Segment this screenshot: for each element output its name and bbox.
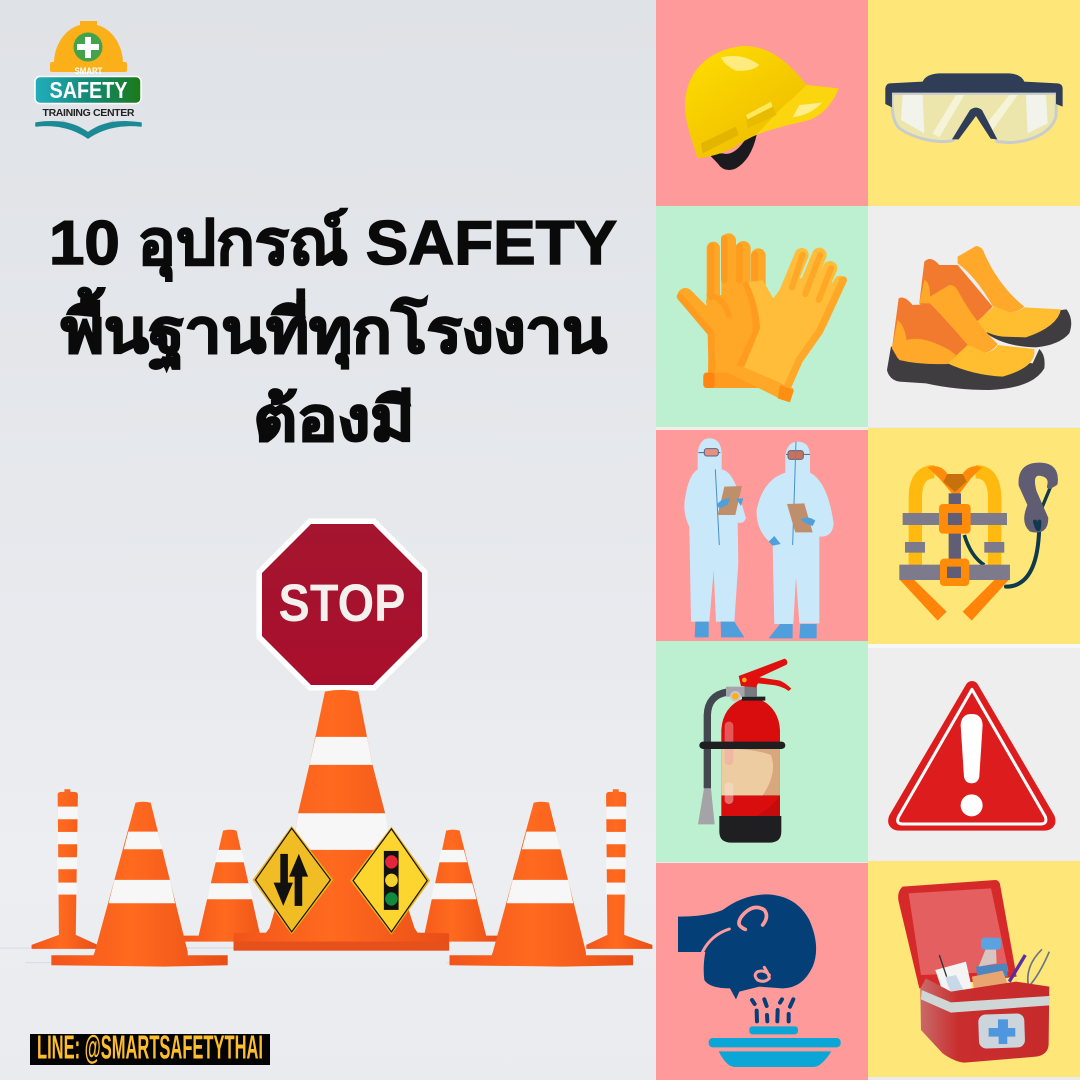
icon: orange gloves (680, 238, 843, 402)
big cone left (51, 802, 228, 967)
main cone (234, 690, 449, 951)
title (49, 208, 617, 453)
small cone right (412, 830, 501, 942)
right post (586, 789, 652, 949)
panel: first aid kit (868, 861, 1080, 1077)
big cone right (450, 802, 633, 967)
road sign: two-way arrows (253, 826, 333, 935)
panel: warning sign (868, 644, 1080, 861)
left post (32, 789, 98, 949)
icon: harness and lanyard (899, 465, 1056, 621)
logo: Smart Safety Training Center: TRAINING CENTER (42, 107, 135, 119)
traffic cones illustration (0, 690, 652, 967)
panel: gloves (656, 206, 868, 427)
panel: safety harness (868, 428, 1080, 644)
icon: extinguisher (698, 659, 791, 843)
LINE handle label: LINE: @SMARTSAFETYTHAI (37, 1028, 263, 1066)
right glove (729, 255, 843, 402)
title: พื้นฐานที่ทุกโรงงาน (61, 287, 607, 370)
icon: head over basin (678, 894, 841, 1067)
panel: hard hat (656, 0, 868, 206)
stop sign (257, 519, 427, 690)
background panel (0, 0, 656, 1080)
icon: warning triangle (895, 688, 1049, 824)
panel: safety goggles (868, 0, 1080, 206)
panel: fire extinguisher (656, 641, 868, 862)
road sign: traffic light (350, 827, 430, 935)
ground shadows (0, 947, 463, 963)
left glove (680, 238, 765, 388)
icon: boots (887, 246, 1071, 390)
LINE handle label (30, 1028, 270, 1066)
icon: red first aid box (898, 880, 1049, 1063)
title: 10 อุปกรณ์ SAFETY (49, 208, 617, 281)
panel: eye wash / vomiting first aid (656, 863, 868, 1080)
logo: Smart Safety Training Center: SAFETY (50, 77, 128, 103)
logo: Smart Safety Training Center (35, 21, 141, 138)
logo: Smart Safety Training Center: SMART (74, 66, 103, 76)
icon: yellow helmet (685, 46, 839, 170)
panel: safety boots (868, 206, 1080, 427)
panel: protective suits (656, 427, 868, 641)
icon: goggles (885, 73, 1063, 143)
icon: two workers in protective suits (684, 438, 834, 638)
title: ต้องมี (254, 386, 414, 453)
small cone left (182, 830, 277, 942)
stop sign: STOP (278, 574, 406, 633)
